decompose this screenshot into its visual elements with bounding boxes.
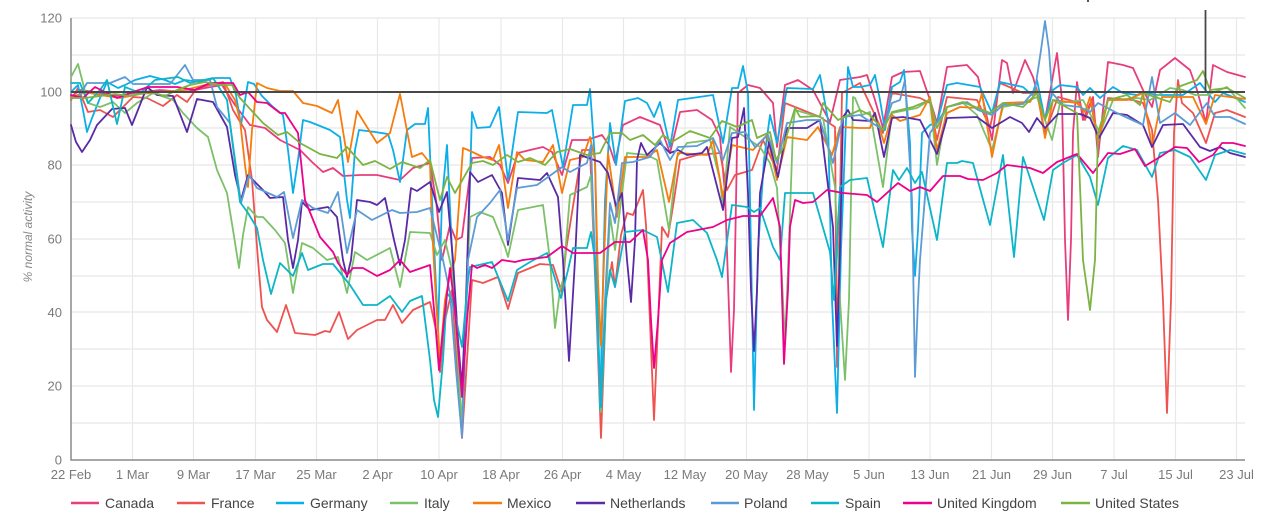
- x axis date labels: 10 Apr: [420, 467, 458, 482]
- x axis date labels: 12 May: [664, 467, 707, 482]
- legend: Germany: Germany: [310, 495, 368, 511]
- legend: Canada: [71, 495, 154, 511]
- reference line at 100: [71, 91, 1245, 93]
- legend: Netherlands: [576, 495, 686, 511]
- legend: Mexico: Mexico: [507, 495, 552, 511]
- x axis date labels: 5 Jun: [853, 467, 885, 482]
- series: Italy: [71, 64, 1245, 425]
- legend: Netherlands: Netherlands: [610, 495, 686, 511]
- y axis tick labels: 80: [48, 158, 62, 172]
- x axis date labels: 4 May: [606, 467, 642, 482]
- legend: Spain: Spain: [845, 495, 881, 511]
- x axis date labels: 26 Apr: [544, 467, 582, 482]
- legend: Mexico: [473, 495, 552, 511]
- x axis date labels: 1 Mar: [116, 467, 150, 482]
- series: Mexico: [71, 83, 1245, 360]
- x axis date labels: 18 Apr: [482, 467, 520, 482]
- legend: Italy: [390, 495, 450, 511]
- x axis date labels: 7 Jul: [1100, 467, 1128, 482]
- series: United States: [71, 71, 1245, 310]
- x axis date labels: 22 Feb: [51, 467, 91, 482]
- x axis date labels: 9 Mar: [177, 467, 211, 482]
- x axis date labels: 25 Mar: [296, 467, 337, 482]
- x axis date labels: 2 Apr: [362, 467, 393, 482]
- x axis date labels: 29 Jun: [1033, 467, 1072, 482]
- x axis date labels: 15 Jul: [1158, 467, 1193, 482]
- legend: Italy: Italy: [424, 495, 450, 511]
- x axis date labels: 23 Jul: [1219, 467, 1254, 482]
- x axis date labels: 20 May: [725, 467, 768, 482]
- series: Canada: [71, 53, 1245, 372]
- legend: United Kingdom: United Kingdom: [937, 495, 1037, 511]
- series: France: [71, 80, 1245, 438]
- legend: Germany: [276, 495, 368, 511]
- y axis tick labels: 20: [48, 378, 62, 394]
- legend: United States: United States: [1095, 495, 1179, 511]
- x axis date labels: 13 Jun: [910, 467, 950, 482]
- legend: Poland: [711, 495, 788, 511]
- x axis date labels: 17 Mar: [235, 467, 276, 482]
- series: Spain: [71, 77, 1245, 417]
- legend: France: France: [211, 495, 255, 511]
- series: United Kingdom: [71, 83, 1245, 397]
- series: Germany: [71, 66, 1245, 435]
- y axis tick labels: 40: [48, 305, 62, 320]
- x axis date labels: 21 Jun: [972, 467, 1011, 482]
- y axis title: % normal activity: [21, 191, 35, 282]
- y axis tick labels: 120: [40, 10, 62, 26]
- annotation marker line: [1204, 10, 1206, 92]
- legend: Canada: Canada: [105, 495, 154, 511]
- data series lines: [71, 21, 1245, 438]
- series: Poland: [71, 21, 1245, 437]
- legend: Spain: [811, 495, 881, 511]
- legend: [71, 495, 1179, 511]
- series: Netherlands: [71, 87, 1245, 387]
- x axis date labels: [51, 467, 1254, 482]
- x axis date labels: 28 May: [786, 467, 829, 482]
- y axis tick labels: 60: [48, 232, 62, 246]
- legend: France: [177, 495, 255, 511]
- y axis tick labels: 0: [55, 452, 62, 468]
- y axis tick labels: [40, 10, 62, 468]
- legend: Poland: Poland: [744, 495, 788, 511]
- y axis tick labels: 100: [40, 84, 62, 100]
